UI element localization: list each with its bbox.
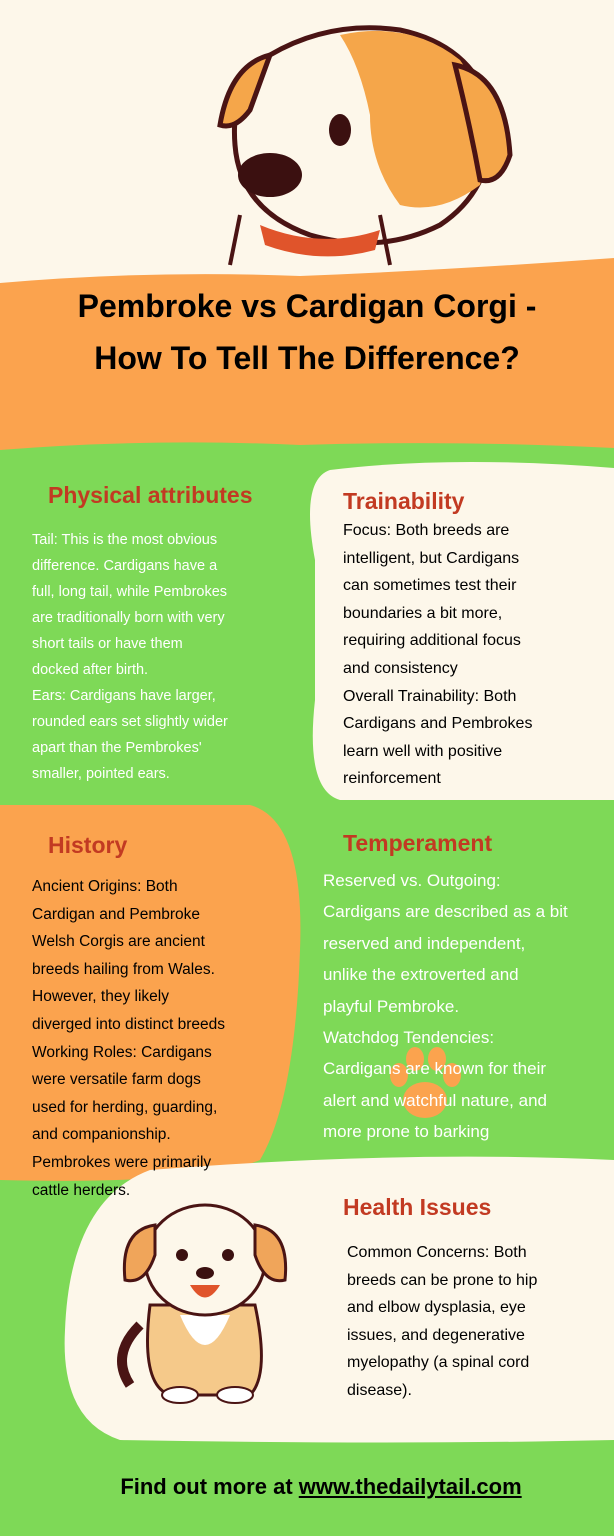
- panel: trainability: [343, 488, 532, 787]
- text: physical attributes: Tail: This is the most obvious: [32, 532, 217, 548]
- text: history: Working Roles: Cardigans: [32, 1044, 212, 1061]
- text: health issues: and elbow dysplasia, eye: [347, 1299, 526, 1316]
- text: history: However, they likely: [32, 988, 169, 1005]
- panel: health issues: [343, 1194, 537, 1399]
- text: temperament: more prone to barking: [323, 1122, 489, 1141]
- text: trainability: intelligent, but Cardigans: [343, 550, 519, 567]
- text: trainability: Cardigans and Pembrokes: [343, 715, 532, 732]
- text: history: used for herding, guarding,: [32, 1099, 217, 1116]
- text: physical attributes: are traditionally born with very: [32, 610, 225, 626]
- text: physical attributes: apart than the Pembrokes': [32, 740, 202, 756]
- text: health issues: issues, and degenerative: [347, 1327, 525, 1344]
- text: trainability: and consistency: [343, 660, 458, 677]
- icon: top dog head: [217, 25, 512, 266]
- text: history: Welsh Corgis are ancient: [32, 933, 205, 950]
- text: temperament: [323, 871, 568, 1141]
- text: health issues: myelopathy (a spinal cord: [347, 1354, 529, 1371]
- footer: Find out more at www.thedailytail.com: [120, 1474, 522, 1499]
- text: history: [32, 878, 225, 1199]
- text: trainability: can sometimes test their: [343, 577, 516, 594]
- text: physical attributes: [32, 532, 228, 782]
- icon: sitting puppy: [117, 1204, 288, 1404]
- heading: physical attributes: Physical attributes: [48, 482, 253, 508]
- text: physical attributes: Ears: Cardigans have larger,: [32, 688, 216, 704]
- text: health issues: breeds can be prone to hip: [347, 1272, 537, 1289]
- heading: health issues: Health Issues: [343, 1194, 491, 1220]
- text: trainability: boundaries a bit more,: [343, 605, 502, 622]
- text: physical attributes: rounded ears set slightly wider: [32, 714, 228, 730]
- panel: history: [32, 832, 225, 1199]
- text: history: diverged into distinct breeds: [32, 1016, 225, 1033]
- title: [78, 288, 536, 376]
- heading: history: History: [48, 832, 127, 858]
- text: history: and companionship.: [32, 1126, 171, 1143]
- text: health issues: disease).: [347, 1382, 412, 1399]
- text: trainability: requiring additional focus: [343, 632, 521, 649]
- text: trainability: learn well with positive: [343, 743, 502, 760]
- text: physical attributes: smaller, pointed ears.: [32, 766, 170, 782]
- text: history: Ancient Origins: Both: [32, 878, 178, 895]
- text: history: breeds hailing from Wales.: [32, 961, 215, 978]
- text: history: Pembrokes were primarily: [32, 1154, 211, 1171]
- text: physical attributes: short tails or have them: [32, 636, 183, 652]
- text: health issues: Common Concerns: Both: [347, 1244, 527, 1261]
- text: temperament: Reserved vs. Outgoing:: [323, 871, 501, 890]
- text: history: Cardigan and Pembroke: [32, 906, 200, 923]
- text: temperament: unlike the extroverted and: [323, 965, 519, 984]
- heading: trainability: Trainability: [343, 488, 464, 514]
- text: trainability: Focus: Both breeds are: [343, 522, 509, 539]
- panel: temperament: [323, 830, 568, 1141]
- text: temperament: Cardigans are described as a bit: [323, 902, 568, 921]
- text: temperament: reserved and independent,: [323, 934, 525, 953]
- heading: temperament: Temperament: [343, 830, 492, 856]
- text: health issues: [347, 1244, 537, 1399]
- text: temperament: alert and watchful nature, and: [323, 1091, 547, 1110]
- icon: paw print: [390, 1047, 461, 1118]
- title: How To Tell The Difference?: [94, 340, 520, 376]
- title: Pembroke vs Cardigan Corgi -: [78, 288, 536, 324]
- text: temperament: playful Pembroke.: [323, 997, 459, 1016]
- text: physical attributes: full, long tail, while Pembrokes: [32, 584, 227, 600]
- text: history: were versatile farm dogs: [32, 1071, 201, 1088]
- text: trainability: Overall Trainability: Both: [343, 688, 516, 705]
- text: physical attributes: difference. Cardigans have a: [32, 558, 217, 574]
- panel: physical attributes: [32, 482, 253, 782]
- text: physical attributes: docked after birth.: [32, 662, 148, 678]
- text: history: cattle herders.: [32, 1182, 130, 1199]
- text: temperament: Cardigans are known for their: [323, 1059, 546, 1078]
- text: temperament: Watchdog Tendencies:: [323, 1028, 494, 1047]
- text: trainability: [343, 522, 532, 787]
- text: trainability: reinforcement: [343, 770, 441, 787]
